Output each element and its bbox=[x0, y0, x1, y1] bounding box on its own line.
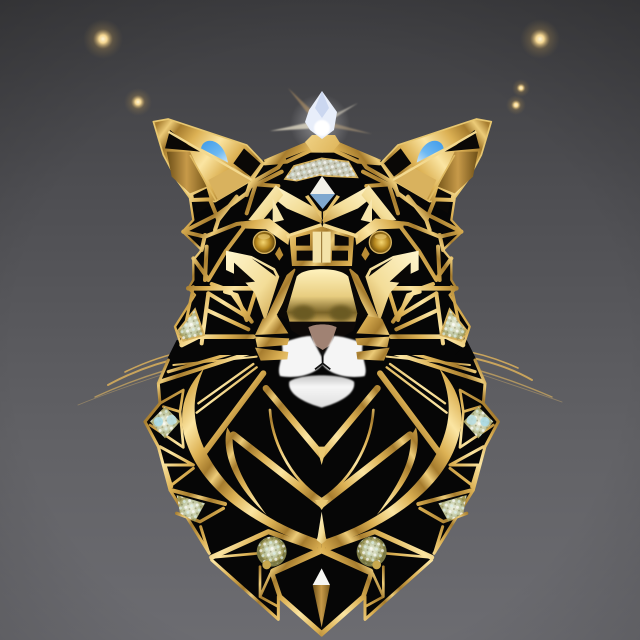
centre spike bbox=[317, 512, 327, 544]
nose side stripe bbox=[255, 267, 297, 335]
muzzle centre cleft bbox=[315, 352, 330, 369]
gem mount bbox=[305, 135, 340, 152]
breastplate left half bbox=[145, 346, 322, 635]
head right half mirrored bbox=[322, 119, 491, 347]
forehead M bbox=[272, 186, 322, 223]
head black silhouette bbox=[175, 143, 470, 355]
centre chevron tips bbox=[315, 447, 328, 510]
muzzle white fur bbox=[279, 336, 366, 377]
lower body: necklace breastplate bbox=[145, 340, 498, 636]
nose highlights bbox=[292, 305, 352, 321]
forehead jewel band bbox=[285, 158, 357, 181]
glowing light orbs bbox=[83, 19, 560, 116]
eye bbox=[253, 231, 283, 261]
lower side gem left bbox=[177, 495, 205, 522]
head gold outline bbox=[175, 198, 202, 347]
head bbox=[153, 119, 491, 377]
star rays bbox=[270, 88, 372, 134]
gem bbox=[305, 91, 337, 139]
diamond cheek panel bbox=[177, 309, 204, 341]
crown band bbox=[263, 142, 312, 165]
inner crescent bbox=[226, 427, 267, 515]
top diamond with star glint bbox=[270, 88, 372, 154]
whiskers bbox=[78, 345, 562, 405]
chin fur bbox=[289, 375, 354, 408]
muzzle gold whisker pads bbox=[255, 316, 390, 361]
head left half bbox=[153, 119, 322, 347]
forehead diamond bbox=[305, 176, 340, 222]
breastplate black silhouette bbox=[145, 340, 498, 636]
nose tip bbox=[288, 322, 357, 353]
large crescent bbox=[182, 368, 322, 549]
ear bbox=[153, 119, 264, 213]
brow bbox=[240, 218, 290, 245]
nose bridge dark sides bbox=[277, 266, 368, 320]
centre pendant gem bbox=[313, 568, 330, 627]
cheek plate bbox=[226, 251, 279, 322]
glow halo bbox=[290, 94, 350, 154]
bottom gem left bbox=[257, 537, 287, 569]
breastplate right half mirrored bbox=[322, 346, 498, 635]
side gem left bbox=[150, 407, 180, 438]
nose bridge bbox=[287, 269, 357, 323]
nose bridge frame bbox=[289, 227, 354, 266]
blue ear gem bbox=[201, 141, 228, 163]
